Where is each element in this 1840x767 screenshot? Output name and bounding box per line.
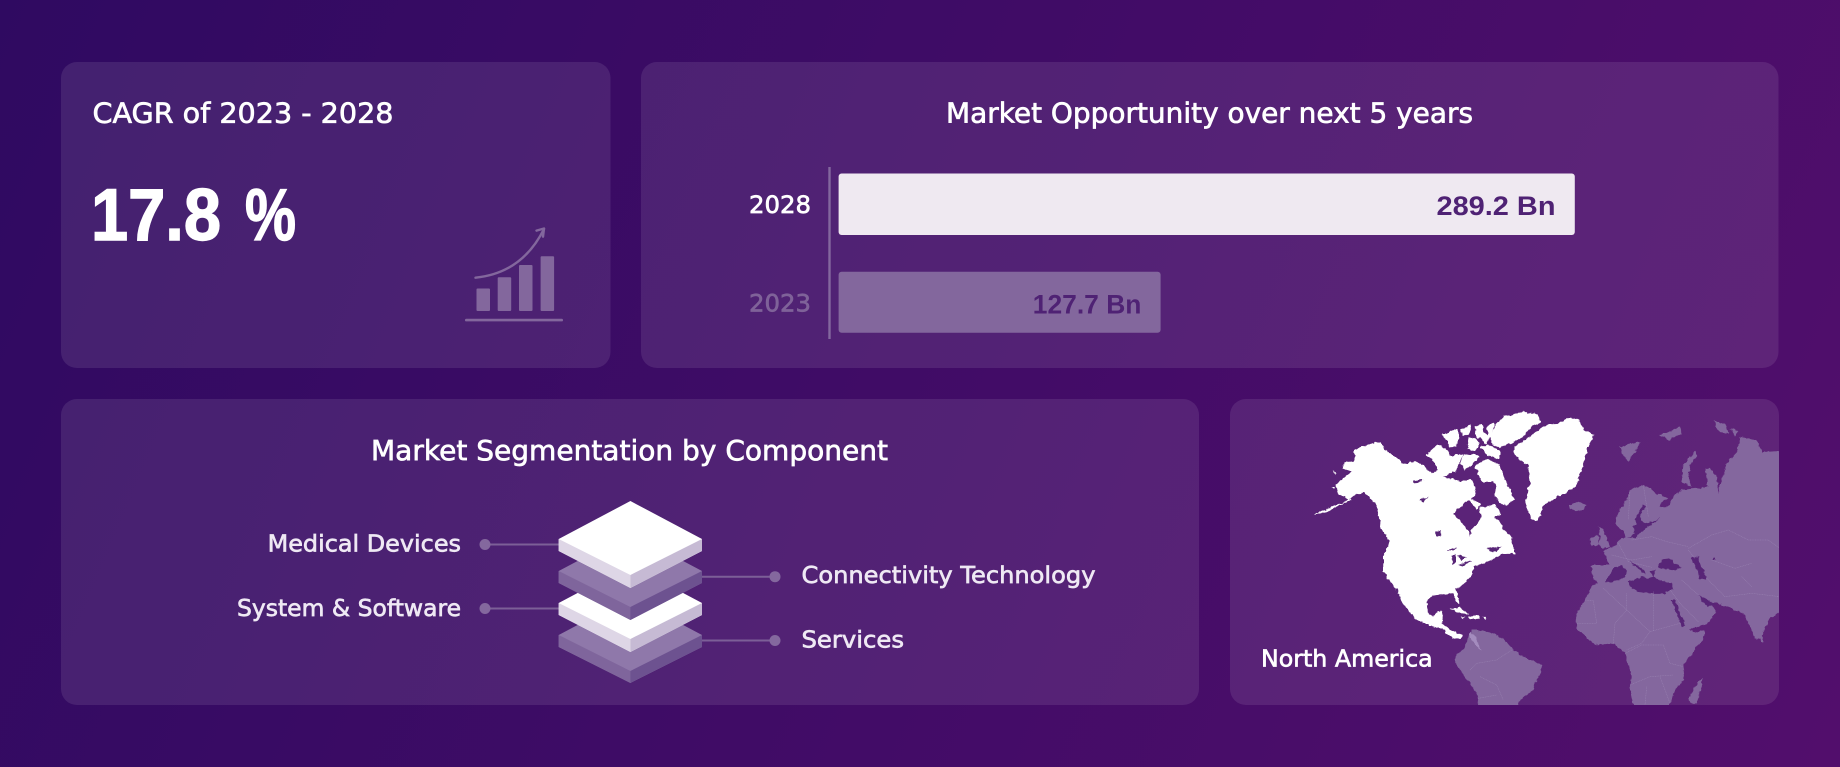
map: Eurasian borders	[1612, 485, 1780, 597]
map: African borders	[1577, 588, 1698, 705]
panel: CAGR	[61, 62, 610, 368]
map: South America	[1455, 630, 1542, 715]
heading: Market Segmentation: Market Segmentation by Component	[371, 435, 888, 467]
map: lakes and details	[1395, 479, 1502, 607]
panel: Market Opportunity	[641, 62, 1778, 368]
icon: growth chart	[465, 228, 563, 321]
value: 17.8 %	[91, 175, 296, 256]
map: North America mainland	[1315, 442, 1515, 638]
connector lines	[480, 539, 780, 646]
label: Connectivity Technology: Connectivity Technology	[802, 561, 1096, 589]
world map	[1315, 413, 1787, 715]
label: Medical Devices: Medical Devices	[268, 530, 461, 558]
label: North America: North America	[1261, 644, 1433, 672]
heading: Market Opportunity: Market Opportunity over next 5 years	[946, 98, 1473, 130]
bar: 2028	[749, 174, 1575, 235]
bar: 2023: 127.7 Bn	[1033, 289, 1141, 319]
bar: 2028: 289.2 Bn	[1436, 191, 1556, 221]
map: Caribbean islands	[1450, 607, 1486, 619]
bar: 2023	[749, 272, 1161, 333]
bar: 2023: 2023	[749, 290, 811, 318]
icon: layered stack	[559, 501, 702, 683]
heading: CAGR of 2023 - 2028: CAGR of 2023 - 2028	[92, 98, 394, 130]
chart axis	[828, 167, 831, 339]
map: Canadian archipelago	[1427, 413, 1540, 508]
panel: North America map	[1230, 399, 1787, 715]
label: Services: Services	[802, 626, 904, 654]
map: small Alaskan islands	[1332, 470, 1336, 489]
panel: Market Segmentation	[61, 399, 1199, 705]
map: South American borders	[1470, 650, 1512, 700]
value: 17.8 %: %	[245, 175, 296, 256]
map: Eurasia and Africa	[1570, 420, 1787, 710]
label: System & Software: System & Software	[237, 594, 461, 622]
map: inland seas	[1605, 505, 1717, 627]
map: Greenland	[1515, 418, 1594, 520]
value: 17.8 %: 17.8	[91, 175, 221, 256]
bar: 2028: 2028	[749, 191, 811, 219]
